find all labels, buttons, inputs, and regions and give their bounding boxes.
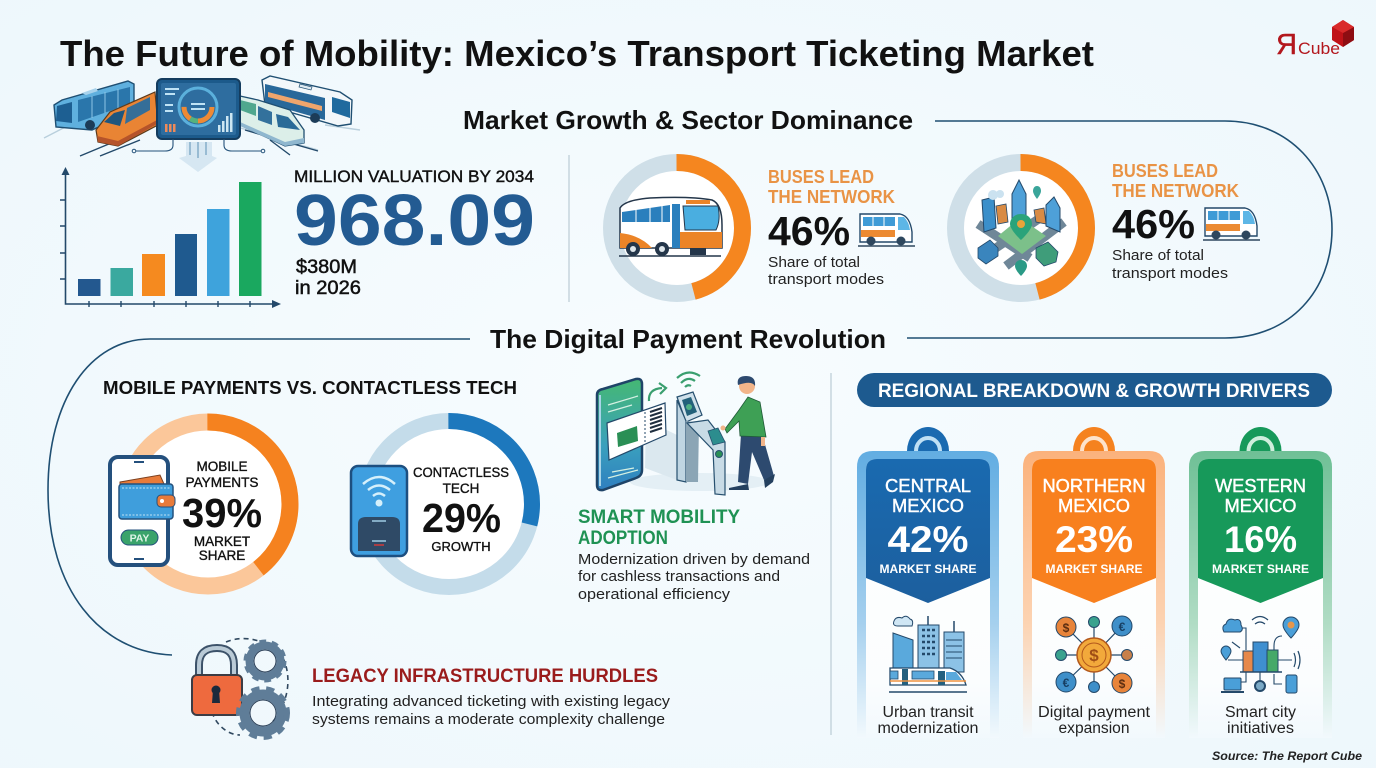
- gate: [677, 392, 702, 422]
- text block: legacy infrastructure hurdles: Integrating advanced ticketing with existing legacy: [312, 694, 671, 710]
- card: northern mexico: expansion: [1058, 720, 1130, 737]
- heading: market growth: Market Growth & Sector Dominance: [463, 105, 913, 135]
- text block: smart mobility adoption: for cashless transactions and: [578, 569, 780, 585]
- logo: RCube: R: [1276, 29, 1297, 61]
- icon: bus: [619, 197, 722, 256]
- icon: digital payment network: $: [1063, 621, 1070, 635]
- card: northern mexico: MEXICO: [1058, 496, 1130, 516]
- connector line: digital payment section: [48, 339, 470, 655]
- icon: digital payment network: [1056, 616, 1132, 693]
- icon: smart city map: [978, 180, 1064, 276]
- card: northern mexico: NORTHERN: [1042, 476, 1146, 496]
- icon: contactless reader: [351, 466, 407, 556]
- stat: valuation: MILLION VALUATION BY 2034: [294, 167, 534, 186]
- panel: mobile payments donut: MOBILE: [196, 459, 248, 474]
- text block: smart mobility adoption: operational efficiency: [578, 587, 731, 603]
- text block: buses lead 2: transport modes: [1112, 265, 1228, 282]
- text block: buses lead 2: THE NETWORK: [1112, 181, 1239, 201]
- card: northern mexico: 23%: [1055, 519, 1133, 560]
- card: western mexico: [1189, 427, 1332, 738]
- left blue bus: [54, 81, 134, 130]
- wifi: [677, 372, 700, 387]
- panel: contactless tech donut: TECH: [443, 481, 479, 496]
- icon: city and train: [889, 616, 967, 692]
- panel: mobile payments donut: MARKET: [194, 534, 250, 549]
- icon: phone with wallet: [110, 457, 175, 565]
- card: western mexico: initiatives: [1227, 720, 1294, 737]
- icon: small bus: [1203, 208, 1260, 240]
- heading: digital payment revolution: The Digital Payment Revolution: [490, 324, 886, 354]
- card: central mexico: MEXICO: [892, 496, 964, 516]
- card: western mexico: Smart city: [1225, 704, 1296, 721]
- panel: buses lead donut 2: [956, 162, 1086, 294]
- text block: buses lead 1: THE NETWORK: [768, 187, 895, 207]
- circuit and arrow: [136, 139, 261, 151]
- dashboard monitor: [157, 79, 240, 139]
- regional breakdown pill heading: REGIONAL BREAKDOWN & GROWTH DRIVERS: [878, 380, 1310, 402]
- card: central mexico: MARKET SHARE: [880, 562, 976, 576]
- text block: buses lead 1: 46%: [768, 208, 850, 254]
- panel: contactless tech donut: [351, 421, 532, 587]
- logo: RCube: [1276, 20, 1354, 61]
- illustration: transit vehicles and dashboard: [44, 76, 360, 172]
- title: The Future of Mobility: Mexico’s Transport Ticketing Market: [60, 33, 1094, 74]
- logo: RCube: Cube: [1298, 39, 1340, 58]
- text block: buses lead 1: BUSES LEAD: [768, 167, 874, 187]
- ground lines: [44, 122, 360, 150]
- text block: legacy infrastructure hurdles: LEGACY INFRASTRUCTURE HURDLES: [312, 666, 658, 687]
- panel: mobile payments donut: SHARE: [199, 548, 245, 563]
- source note: Source: The Report Cube: [1212, 749, 1362, 763]
- arrow: [649, 388, 662, 401]
- card: northern mexico: [1023, 427, 1165, 738]
- illustration: smart mobility gate: [597, 372, 775, 495]
- panel: contactless tech donut: CONTACTLESS: [413, 465, 509, 480]
- stat: valuation: [294, 167, 535, 299]
- white bus: [262, 76, 352, 126]
- text block: legacy infrastructure hurdles: systems remains a moderate complexity challenge: [312, 712, 665, 728]
- card: western mexico: MEXICO: [1224, 496, 1296, 516]
- icon: smart city network: [1221, 616, 1300, 693]
- green train: [240, 96, 304, 146]
- stat: valuation: 968.09: [294, 181, 535, 261]
- person: [738, 434, 774, 484]
- card: western mexico: 16%: [1224, 519, 1297, 560]
- text block: legacy infrastructure hurdles: [312, 666, 671, 728]
- text block: buses lead 2: BUSES LEAD: [1112, 161, 1218, 181]
- icon: digital payment network: €: [1063, 676, 1070, 690]
- stat: valuation: in 2026: [295, 278, 361, 299]
- card: central mexico: 42%: [888, 519, 968, 560]
- text block: smart mobility adoption: ADOPTION: [578, 528, 668, 549]
- text block: smart mobility adoption: SMART MOBILITY: [578, 507, 740, 528]
- panel: mobile payments donut: [110, 422, 290, 586]
- text block: smart mobility adoption: Modernization driven by demand: [578, 552, 810, 568]
- icon: phone with wallet: PAY: [130, 532, 149, 544]
- orange train: [96, 92, 158, 146]
- text block: buses lead 1: Share of total: [768, 254, 860, 271]
- card: central mexico: [857, 427, 999, 738]
- bar chart: market growth: [60, 167, 281, 308]
- text block: buses lead 2: Share of total: [1112, 247, 1204, 264]
- card: central mexico: CENTRAL: [885, 476, 971, 496]
- text block: buses lead 2: [1112, 161, 1260, 282]
- panel: contactless tech donut: GROWTH: [431, 539, 491, 554]
- stat: valuation: $380M: [296, 257, 357, 278]
- card: northern mexico: Digital payment: [1038, 704, 1151, 721]
- text block: smart mobility adoption: [578, 507, 810, 603]
- panel: contactless tech donut: 29%: [422, 495, 501, 541]
- panel: buses lead donut 1: [612, 162, 742, 294]
- text block: buses lead 1: [768, 167, 915, 288]
- text block: buses lead 2: 46%: [1112, 201, 1195, 247]
- icon: padlock and gears: [192, 639, 288, 737]
- card: western mexico: MARKET SHARE: [1212, 562, 1309, 576]
- ticket: [607, 403, 666, 460]
- card: central mexico: Urban transit: [882, 704, 974, 721]
- icon: digital payment network: $: [1119, 677, 1126, 691]
- icon: digital payment network: €: [1119, 620, 1126, 634]
- card: western mexico: WESTERN: [1215, 476, 1306, 496]
- divider: [568, 155, 570, 302]
- panel: mobile payments donut: PAYMENTS: [186, 475, 258, 490]
- icon: digital payment network: $: [1089, 646, 1099, 665]
- card: northern mexico: MARKET SHARE: [1046, 562, 1142, 576]
- regional breakdown pill heading: [857, 373, 1332, 407]
- panel: mobile payments donut: 39%: [182, 490, 262, 536]
- subheading: mobile vs contactless: MOBILE PAYMENTS VS. CONTACTLESS TECH: [103, 377, 517, 398]
- icon: small bus: [858, 214, 915, 246]
- divider: [830, 373, 832, 735]
- card: central mexico: modernization: [878, 720, 978, 737]
- phone: [597, 379, 642, 490]
- connector line: market growth section: [907, 121, 1332, 338]
- text block: buses lead 1: transport modes: [768, 271, 884, 288]
